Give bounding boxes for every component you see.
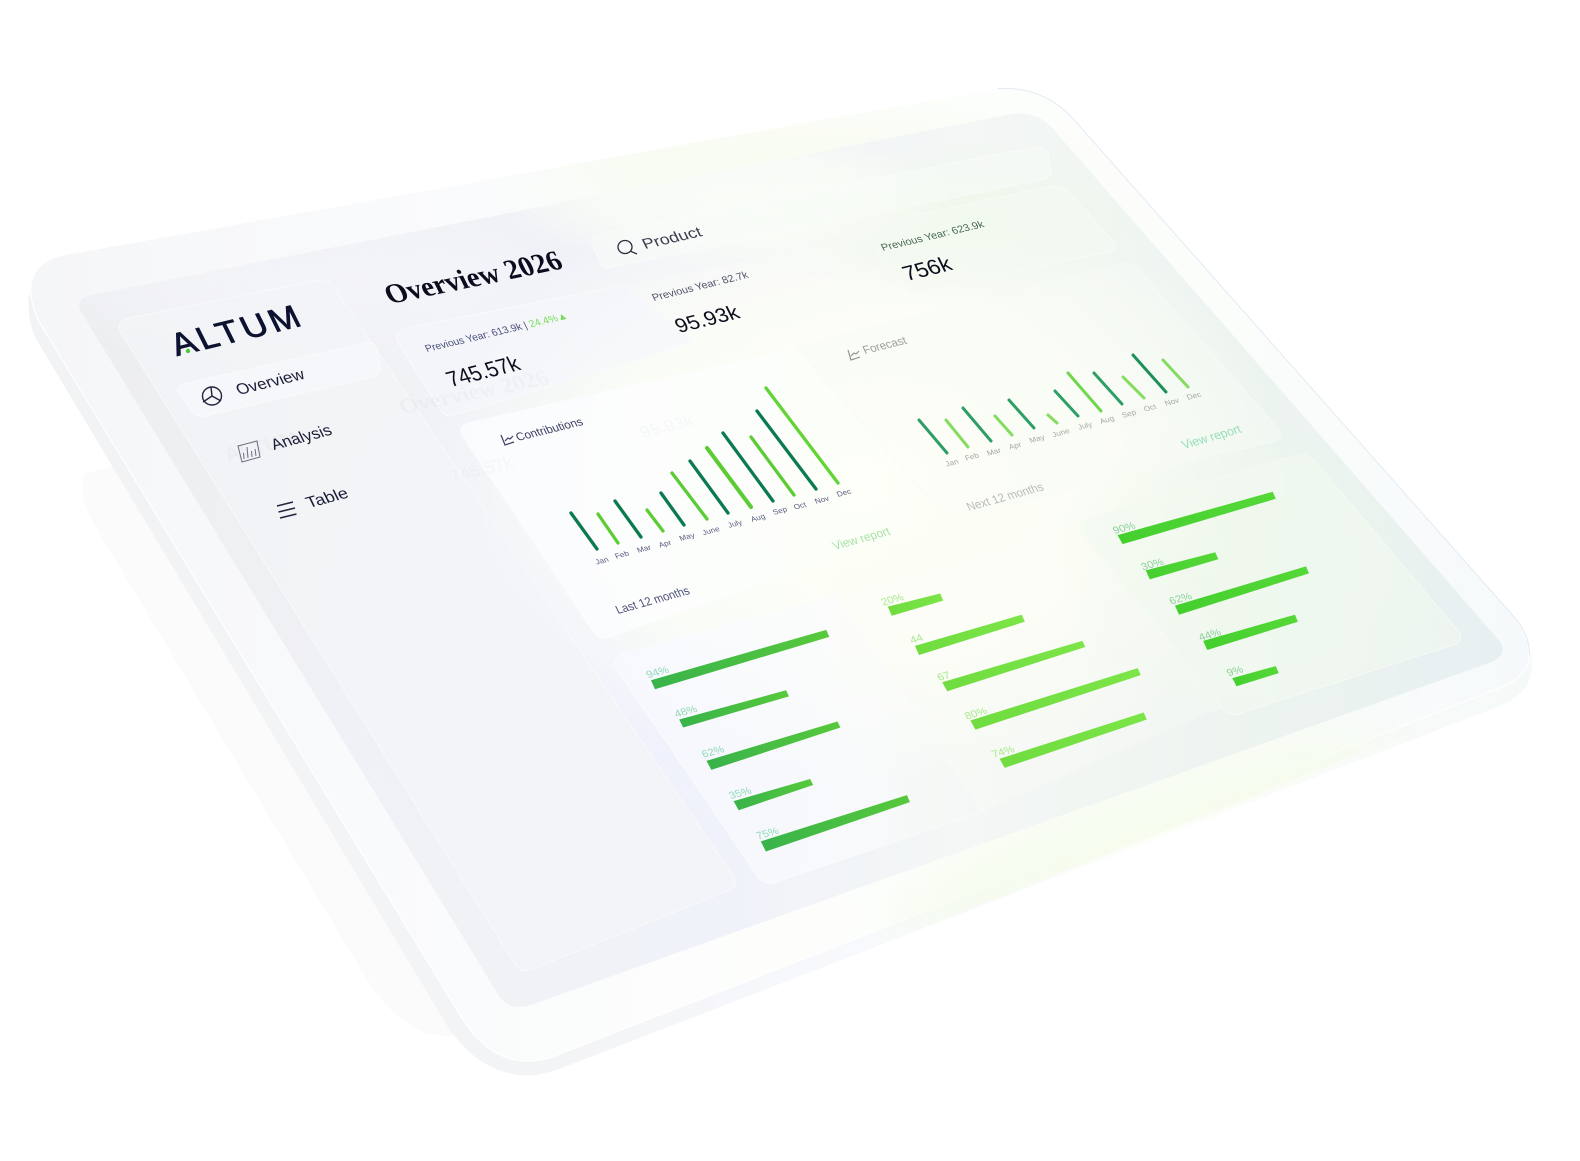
forecast month labels: July (1076, 420, 1094, 432)
stat: 745.57k: 745.57k (442, 351, 524, 391)
panel: sidebar (119, 280, 735, 970)
panel: stat card middle (627, 242, 912, 343)
forecast month labels (944, 390, 1203, 468)
forecast month labels: Aug (1098, 414, 1116, 426)
nav item: Table: Table (303, 484, 351, 511)
bars: right group (1118, 492, 1309, 686)
forecast month labels: June (1051, 427, 1071, 439)
ghost reflections of dashboard text (220, 366, 697, 485)
panel: stat card top right (857, 186, 1115, 294)
month labels: Jan (594, 555, 610, 566)
forecast month labels: Feb (963, 451, 981, 463)
heading: contributions: Contributions (513, 415, 585, 444)
bars: left group (651, 630, 910, 852)
month labels: Aug (749, 512, 767, 524)
percent labels: left group: 48% (673, 704, 700, 720)
forecast month labels: Mar (985, 446, 1003, 458)
percent labels: right group: 30% (1139, 556, 1166, 573)
nav item: Analysis (238, 421, 335, 462)
stat: 95.93k: Previous Year: 82.7k (650, 269, 751, 304)
forecast month labels: Sep (1120, 408, 1138, 420)
month labels: Feb (613, 549, 631, 561)
month labels: Apr (657, 538, 673, 549)
month labels: Mar (635, 543, 653, 555)
percent labels: middle group (879, 592, 1017, 760)
month labels: May (678, 531, 696, 543)
panel: contributions (460, 348, 942, 639)
icon: forecast line chart (848, 350, 860, 360)
panel: bars left (615, 595, 983, 883)
forecast month labels: Jan (944, 457, 960, 468)
ghost reflections of dashboard text: 95.93k (636, 411, 697, 441)
panel: forecast (796, 264, 1280, 519)
device top right highlight edge (998, 88, 1530, 655)
nav item: Analysis: Analysis (268, 421, 335, 453)
percent labels: right group: 9% (1225, 664, 1246, 679)
percent labels: right group (1111, 520, 1246, 679)
bars: monthly contributions (571, 388, 838, 549)
ghost reflections of dashboard text: Overview 2026 (394, 366, 554, 419)
ghost reflections of dashboard text: ALTUM (220, 427, 303, 466)
stat: 756k (879, 219, 987, 285)
screen (60, 113, 1503, 1007)
title: Overview 2026 (378, 244, 568, 310)
month labels: Nov (813, 494, 831, 506)
heading: forecast: Forecast (860, 334, 910, 357)
device body (31, 88, 1530, 1061)
forecast month labels: Nov (1163, 396, 1181, 408)
forecast month labels: Dec (1185, 390, 1203, 402)
month labels: July (726, 518, 744, 530)
icon: line chart (501, 435, 514, 445)
percent labels: left group: 35% (727, 785, 754, 802)
search: Product (639, 224, 706, 252)
month labels: Dec (835, 487, 853, 499)
forecast month labels: May (1028, 433, 1046, 445)
percent labels: right group: 62% (1167, 591, 1194, 607)
percent labels: middle group: 74% (990, 744, 1017, 760)
month labels (594, 487, 853, 566)
month labels: Oct (792, 500, 809, 511)
panel: bars right (1081, 455, 1461, 715)
month labels: Sep (771, 505, 789, 517)
percent labels: left group (644, 664, 781, 842)
link: forecast view report: View report (1179, 422, 1244, 452)
percent labels: middle group: 20% (879, 592, 906, 608)
panel: search strip (591, 147, 1052, 268)
month labels: June (701, 525, 721, 537)
search (618, 224, 706, 254)
percent labels: left group: 62% (700, 744, 727, 760)
panel: stat card left (397, 285, 693, 416)
percent labels: middle group: 44 (908, 632, 925, 646)
nav item: Overview (177, 343, 380, 416)
percent labels: middle group: 80% (963, 706, 990, 722)
forecast month labels: Apr (1007, 440, 1023, 451)
chart: contributions (501, 388, 893, 617)
caption: next 12 months: Next 12 months (964, 480, 1046, 514)
nav item: Overview: Overview (233, 365, 308, 398)
ghost reflections of dashboard text: 745.57k (446, 453, 517, 485)
stat: 756k: Previous Year: 623.9k (879, 219, 987, 254)
logo: ALTUM: ALTUM (164, 299, 307, 363)
percent labels: left group: 75% (754, 825, 781, 842)
device base lip (28, 101, 1532, 1075)
bars: monthly forecast (919, 355, 1188, 453)
bars: middle group (888, 594, 1147, 768)
link: view report: View report (830, 524, 893, 553)
forecast month labels: Oct (1142, 402, 1159, 413)
body glows (205, 132, 1348, 922)
ghost back plate shadow (83, 464, 474, 1036)
chart: forecast (848, 334, 1244, 514)
percent labels: right group: 90% (1111, 520, 1138, 537)
nav item: Table (277, 484, 351, 518)
stat: 95.93k (650, 269, 751, 337)
stat: 95.93k: 95.93k (671, 301, 744, 337)
percent labels: left group: 94% (644, 664, 671, 681)
caption: last 12 months: Last 12 months (613, 583, 692, 617)
stat: 745.57k (423, 311, 570, 391)
percent labels: right group: 44% (1197, 627, 1224, 643)
panel: bars middle (836, 524, 1221, 811)
stat: 745.57k: Previous Year: 613.9k | 24.4%▲ (423, 311, 570, 355)
percent labels: middle group: 67 (935, 670, 952, 683)
stat: 756k: 756k (898, 252, 956, 285)
